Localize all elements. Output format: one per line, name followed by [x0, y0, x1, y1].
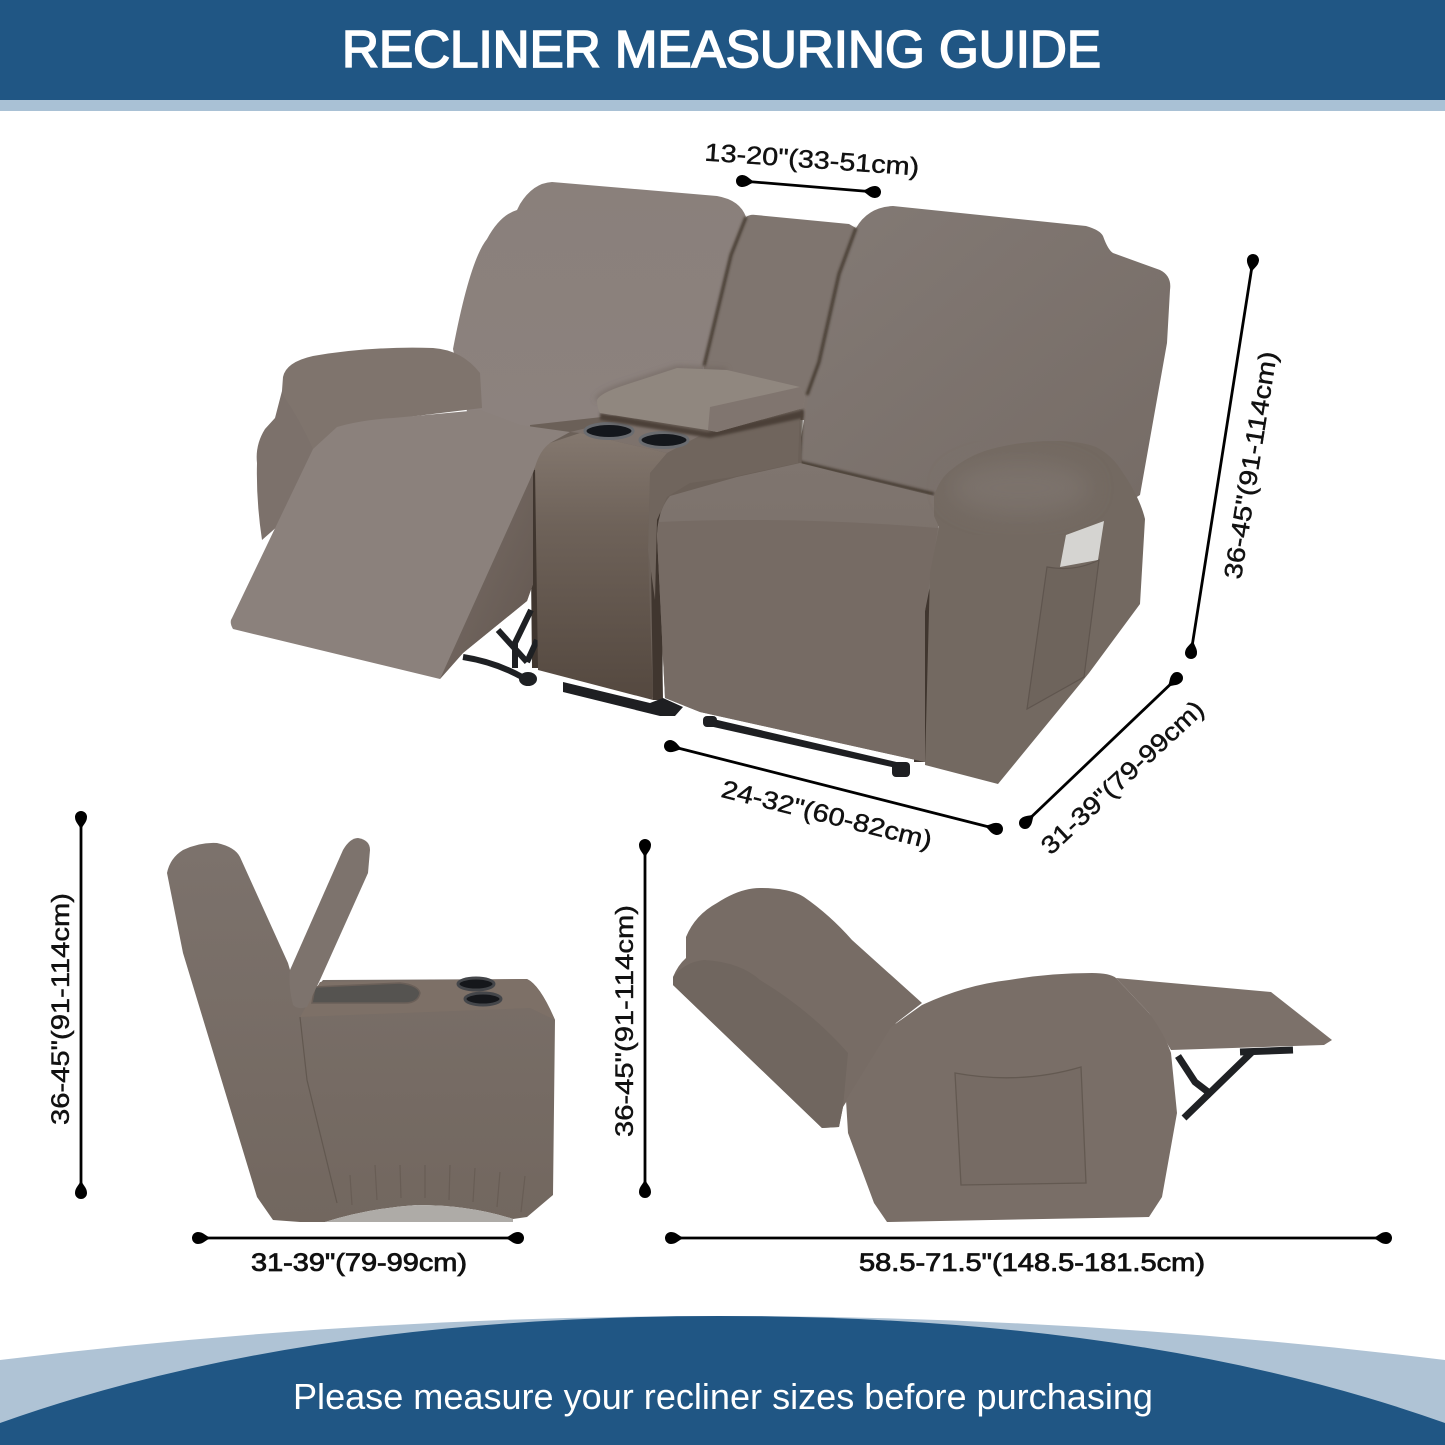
body	[846, 973, 1177, 1222]
storage opening	[312, 983, 420, 1003]
reclined back	[673, 888, 922, 1128]
dimension: recliner height	[611, 839, 651, 1198]
dimension: chair depth	[192, 1232, 524, 1277]
footer message: Please measure your recliner sizes before purchasing	[293, 1376, 1153, 1417]
lid shadow	[600, 410, 803, 438]
back cushion creases	[704, 217, 934, 494]
dimension: loveseat depth	[1017, 670, 1210, 860]
cup holders	[458, 978, 494, 990]
right seat	[657, 463, 940, 762]
front fold line	[300, 1017, 337, 1203]
dimension: recliner length: 58.5-71.5"(148.5-181.5cm)	[859, 1249, 1205, 1277]
seat front fold	[657, 520, 938, 762]
centre back panel	[700, 215, 856, 420]
loveseat recliner photo	[231, 182, 1170, 784]
lifted lid	[289, 838, 370, 1008]
side view: console chair	[167, 838, 555, 1222]
seat base bar and feet	[703, 716, 910, 777]
left footrest	[231, 410, 570, 679]
extended footrest	[1116, 978, 1332, 1050]
dimension: seat width: 24-32"(60-82cm)	[719, 775, 935, 855]
dimension: recliner height: 36-45"(91-114cm)	[611, 905, 639, 1137]
left back cushion	[453, 182, 746, 445]
console foot bar	[563, 682, 683, 716]
centre base fill	[530, 400, 802, 700]
dimension: chair height: 36-45"(91-114cm)	[47, 893, 75, 1125]
magazine in pocket	[1060, 521, 1104, 567]
dimension: chair depth: 31-39"(79-99cm)	[251, 1249, 467, 1277]
base frame	[325, 1205, 513, 1222]
side view: extended recliner	[673, 888, 1332, 1222]
left body side	[257, 377, 330, 540]
title: RECLINER MEASURING GUIDE	[342, 21, 1101, 79]
gap shadows between modules	[530, 470, 930, 762]
console side	[648, 408, 800, 600]
footrest side shade	[440, 473, 533, 679]
dimension: loveseat height	[1184, 253, 1283, 660]
lid soft outline shadow	[597, 368, 727, 400]
dimension: recliner length	[665, 1232, 1392, 1277]
right back cushion	[795, 206, 1170, 520]
dimension: loveseat height: 36-45"(91-114cm)	[1219, 349, 1283, 581]
console front	[535, 433, 667, 700]
dimension: console width	[704, 139, 920, 198]
top of console	[300, 979, 555, 1020]
arm top highlight	[950, 462, 1090, 514]
right armrest	[925, 441, 1145, 784]
footer banner	[0, 1316, 1445, 1445]
header banner	[0, 0, 1445, 111]
back side panel	[673, 960, 848, 1128]
console top	[570, 420, 705, 453]
footrest mechanism	[463, 610, 537, 683]
left armrest	[283, 348, 482, 449]
dimension: loveseat depth: 31-39"(79-99cm)	[1036, 695, 1210, 860]
side pocket	[1027, 560, 1099, 709]
dimension: console width: 13-20"(33-51cm)	[704, 139, 920, 181]
cup holder left	[585, 424, 633, 438]
console lid	[597, 368, 805, 432]
mechanism	[1178, 1050, 1293, 1118]
elastic gathers at hem	[350, 1165, 525, 1212]
dimension: seat width	[663, 739, 1004, 855]
cup holder right	[640, 432, 688, 448]
lid front edge	[708, 387, 805, 432]
dimension: chair height	[47, 811, 87, 1199]
chair body	[167, 843, 555, 1222]
side pocket	[955, 1067, 1086, 1185]
